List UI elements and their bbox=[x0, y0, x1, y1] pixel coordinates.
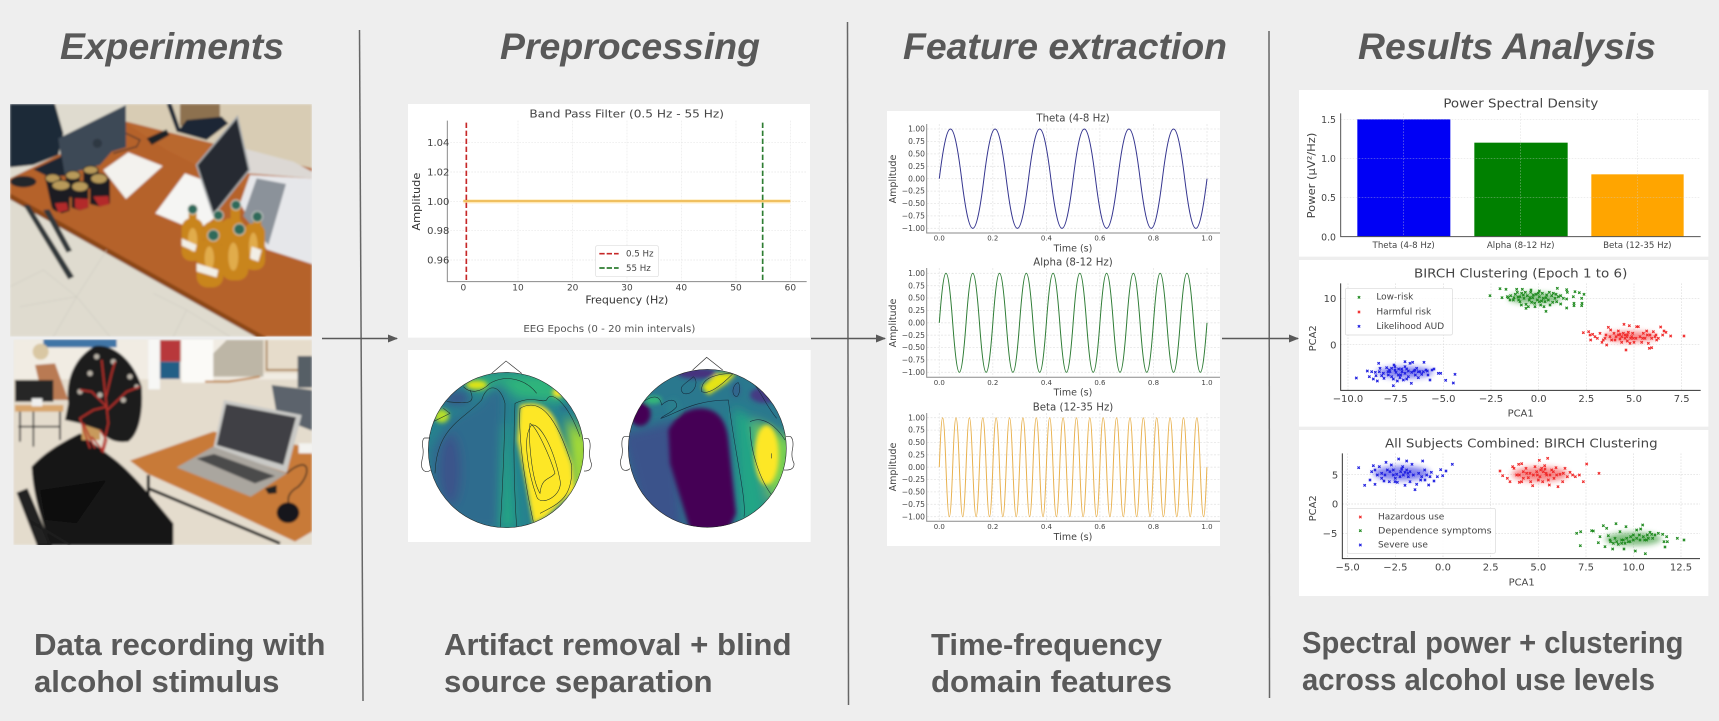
chart: theta wave bbox=[888, 114, 1220, 254]
axis tick labels: −5 bbox=[1323, 529, 1337, 540]
x axis tick labels: 20 bbox=[567, 284, 579, 294]
arrow: preprocessing to feature extraction bbox=[811, 338, 885, 340]
cutoff line 0.5 Hz bbox=[464, 123, 469, 282]
chart: alpha wave: 1.0 bbox=[1201, 379, 1213, 387]
caption: experiments bbox=[34, 627, 326, 699]
y axis tick labels: 1.00 bbox=[427, 197, 449, 208]
caption: feature extraction bbox=[931, 627, 1172, 699]
chart: beta wave: 0.75 bbox=[908, 426, 925, 435]
caption: feature extraction: Time-frequency bbox=[931, 627, 1163, 662]
x axis tick labels: 60 bbox=[785, 284, 796, 294]
legend: Likelihood AUD bbox=[1376, 322, 1444, 332]
chart: beta wave: −0.75 bbox=[902, 500, 925, 509]
axis tick labels: 0 bbox=[1330, 340, 1337, 351]
axis tick labels: 2.5 bbox=[1578, 394, 1594, 405]
axis tick labels: 10.0 bbox=[1623, 562, 1645, 573]
bar: beta bbox=[1591, 174, 1684, 237]
chart: alpha wave: −1.00 bbox=[902, 368, 925, 377]
panel: power spectral density bar chart: Power (μV²/Hz) bbox=[1305, 133, 1318, 218]
y axis ticks and label: 0.5 bbox=[1321, 193, 1336, 204]
caption: preprocessing: source separation bbox=[444, 664, 713, 699]
panel: feature extraction sine charts bbox=[887, 111, 1220, 546]
dense cluster cores bbox=[1377, 293, 1657, 378]
divider line 3 bbox=[1268, 31, 1270, 698]
bar: theta bbox=[1357, 119, 1450, 237]
caption: results analysis: Spectral power + clustering bbox=[1302, 625, 1684, 660]
axis tick labels: 5.0 bbox=[1626, 394, 1642, 405]
y axis tick labels: 0.98 bbox=[427, 226, 449, 237]
chart: beta wave: 0.4 bbox=[1041, 523, 1053, 531]
chart: theta wave: 0.6 bbox=[1094, 234, 1106, 242]
x axis category labels: Theta (4-8 Hz) bbox=[1372, 241, 1435, 251]
axis tick labels: 10 bbox=[1324, 294, 1336, 305]
y axis ticks and label: 1.5 bbox=[1321, 115, 1336, 126]
axis tick labels: 0.0 bbox=[1435, 562, 1451, 573]
chart: beta wave: 0.8 bbox=[1148, 523, 1159, 531]
chart: alpha wave: Amplitude bbox=[888, 299, 899, 347]
chart: beta wave: 0.2 bbox=[987, 523, 998, 531]
legend bbox=[1345, 288, 1452, 335]
photo: table with alcohol stimulus bbox=[10, 104, 312, 337]
legend: Low-risk bbox=[1376, 293, 1414, 303]
legend: Hazardous use bbox=[1378, 513, 1445, 523]
axis labels: PCA2 bbox=[1308, 495, 1319, 521]
chart: theta wave: 0.4 bbox=[1041, 234, 1053, 242]
legend bbox=[1347, 508, 1495, 553]
panel: BIRCH clustering all subjects bbox=[1299, 430, 1708, 596]
chart: beta wave: 0.50 bbox=[908, 438, 925, 447]
y axis tick labels: 1.02 bbox=[427, 168, 449, 179]
chart: beta wave bbox=[888, 402, 1220, 543]
x axis tick labels bbox=[460, 284, 796, 294]
chart: theta wave: 0.00 bbox=[908, 174, 925, 183]
chart: theta wave: Time (s) bbox=[1053, 244, 1092, 254]
panel: BIRCH clustering epoch 1 to 6 bbox=[1299, 260, 1708, 427]
caption: feature extraction: domain features bbox=[931, 664, 1172, 699]
scatter: severe use cluster bbox=[1359, 459, 1452, 490]
chart: theta wave: 0.0 bbox=[934, 234, 945, 242]
chart: theta wave: Theta (4-8 Hz) bbox=[1035, 114, 1110, 124]
legend: 0.5 Hz bbox=[626, 250, 654, 260]
chart title: Band Pass Filter (0.5 Hz - 55 Hz) bbox=[529, 108, 724, 121]
axis tick labels: 2.5 bbox=[1483, 562, 1499, 573]
chart: alpha wave: −0.25 bbox=[902, 331, 925, 340]
axis labels: PCA1 bbox=[1509, 577, 1535, 588]
legend: Harmful risk bbox=[1376, 307, 1432, 317]
chart: beta wave: Beta (12-35 Hz) bbox=[1033, 402, 1113, 414]
chart: alpha wave: Time (s) bbox=[1053, 388, 1092, 398]
chart: beta wave: 0.25 bbox=[908, 450, 925, 459]
arrow: feature extraction to results bbox=[1222, 338, 1298, 340]
chart: alpha wave: −0.75 bbox=[902, 356, 925, 364]
chart: theta wave: 1.00 bbox=[908, 125, 925, 134]
arrow: experiments to preprocessing bbox=[322, 338, 397, 340]
caption: experiments: Data recording with bbox=[34, 627, 326, 662]
chart: theta wave: −0.75 bbox=[902, 212, 925, 220]
axis tick labels: −7.5 bbox=[1384, 394, 1408, 405]
axis labels: PCA1 bbox=[1508, 409, 1534, 420]
x axis tick labels: 30 bbox=[621, 284, 633, 294]
chart: alpha wave: 0.2 bbox=[987, 379, 998, 387]
chart: theta wave: 0.2 bbox=[987, 234, 998, 242]
caption: results analysis bbox=[1302, 625, 1684, 697]
x axis tick labels: 50 bbox=[730, 284, 742, 294]
y axis ticks and label bbox=[1321, 115, 1336, 243]
x axis tick labels: 10 bbox=[512, 284, 524, 294]
heading: Experiments: Experiments bbox=[60, 26, 284, 67]
chart: alpha wave: 1.00 bbox=[908, 269, 925, 278]
panel: band pass filter chart bbox=[408, 104, 810, 338]
legend bbox=[596, 246, 658, 277]
topomap right bbox=[620, 357, 794, 533]
chart title: BIRCH Clustering (Epoch 1 to 6) bbox=[1414, 266, 1627, 280]
divider line 1 bbox=[360, 30, 363, 701]
chart: theta wave: 1.0 bbox=[1201, 234, 1213, 242]
chart title: Power Spectral Density bbox=[1443, 96, 1598, 110]
y axis tick labels bbox=[427, 138, 449, 267]
x axis category labels bbox=[1372, 241, 1672, 251]
heading: Results Analysis: Results Analysis bbox=[1358, 26, 1656, 67]
chart: theta wave: 0.8 bbox=[1148, 234, 1159, 242]
y axis label: Amplitude bbox=[410, 173, 423, 231]
chart: alpha wave: 0.0 bbox=[934, 379, 945, 387]
topomap left bbox=[421, 361, 591, 530]
axis labels: PCA2 bbox=[1308, 325, 1319, 351]
chart: beta wave: 1.00 bbox=[908, 413, 925, 422]
y axis tick labels: 0.96 bbox=[427, 256, 449, 267]
axis tick labels: −10.0 bbox=[1333, 394, 1363, 405]
y axis ticks and label: 1.0 bbox=[1321, 154, 1336, 165]
axis labels bbox=[1308, 495, 1535, 588]
divider line 2 bbox=[848, 22, 849, 705]
heading: Feature extraction: Feature extraction bbox=[903, 26, 1227, 67]
chart: alpha wave: Alpha (8-12 Hz) bbox=[1033, 258, 1113, 268]
scatter: harmful risk cluster bbox=[1583, 324, 1684, 350]
caption: EEG epochs: EEG Epochs (0 - 20 min intervals) bbox=[523, 324, 695, 335]
panel: power spectral density bar chart bbox=[1299, 90, 1708, 257]
x axis tick labels: 40 bbox=[676, 284, 687, 294]
chart: alpha wave: 0.25 bbox=[908, 306, 925, 315]
cutoff line 55 Hz bbox=[760, 123, 765, 282]
scatter: low-risk cluster bbox=[1490, 288, 1584, 311]
axis tick labels: 5 bbox=[1332, 470, 1338, 481]
axis tick labels bbox=[1324, 294, 1690, 405]
scatter: hazardous use cluster bbox=[1500, 458, 1599, 487]
axis tick labels: 12.5 bbox=[1670, 562, 1692, 573]
axis tick labels: −5.0 bbox=[1431, 394, 1455, 405]
x axis category labels: Beta (12-35 Hz) bbox=[1603, 241, 1672, 251]
legend: 55 Hz bbox=[626, 264, 651, 274]
chart: theta wave: −0.25 bbox=[902, 187, 925, 196]
photo: participant wearing EEG cap bbox=[13, 339, 312, 545]
chart: alpha wave: −0.50 bbox=[902, 343, 925, 352]
axis tick labels: 0.0 bbox=[1531, 394, 1547, 405]
heading: Preprocessing: Preprocessing bbox=[500, 26, 760, 67]
y axis ticks and label: 0.0 bbox=[1321, 232, 1336, 243]
chart: theta wave: 0.75 bbox=[908, 137, 925, 146]
chart: beta wave: −0.50 bbox=[902, 488, 925, 496]
chart: alpha wave: 0.75 bbox=[908, 281, 925, 290]
chart: theta wave: Amplitude bbox=[888, 155, 899, 203]
caption: preprocessing: Artifact removal + blind bbox=[444, 627, 792, 662]
chart: beta wave: 0.0 bbox=[934, 523, 945, 531]
chart: beta wave: 1.0 bbox=[1201, 523, 1213, 531]
chart: theta wave: −1.00 bbox=[902, 224, 925, 233]
legend: Severe use bbox=[1378, 540, 1428, 550]
caption: results analysis: across alcohol use levels bbox=[1302, 662, 1655, 697]
chart: beta wave: 0.6 bbox=[1094, 523, 1106, 531]
caption: preprocessing bbox=[444, 627, 792, 699]
panel: EEG topographic maps bbox=[408, 350, 811, 542]
axis tick labels: 5.0 bbox=[1530, 562, 1546, 573]
chart: alpha wave: 0.8 bbox=[1148, 379, 1159, 387]
chart: theta wave: 0.25 bbox=[908, 162, 925, 171]
legend: Dependence symptoms bbox=[1378, 526, 1492, 536]
scatter: likelihood AUD cluster bbox=[1356, 362, 1455, 386]
chart title: All Subjects Combined: BIRCH Clustering bbox=[1385, 436, 1658, 450]
chart: theta wave: −0.50 bbox=[902, 199, 925, 208]
scatter: dependence symptoms cluster bbox=[1577, 524, 1684, 554]
x axis label: Frequency (Hz) bbox=[585, 294, 668, 307]
chart: beta wave: 0.00 bbox=[908, 463, 925, 472]
chart: alpha wave: 0.4 bbox=[1041, 379, 1053, 387]
chart: beta wave: Amplitude bbox=[888, 443, 899, 491]
chart: beta wave: −1.00 bbox=[902, 512, 925, 521]
chart: alpha wave: 0.50 bbox=[908, 294, 925, 303]
chart: beta wave: Time (s) bbox=[1053, 532, 1092, 543]
axis tick labels: 7.5 bbox=[1674, 394, 1690, 405]
chart: alpha wave: 0.6 bbox=[1094, 379, 1106, 387]
axis tick labels: −2.5 bbox=[1479, 394, 1503, 405]
dense cluster cores bbox=[1373, 466, 1662, 546]
axis tick labels: 7.5 bbox=[1578, 562, 1594, 573]
axis tick labels: 0 bbox=[1332, 500, 1338, 511]
caption: experiments: alcohol stimulus bbox=[34, 664, 280, 699]
chart: beta wave: −0.25 bbox=[902, 475, 925, 484]
x axis category labels: Alpha (8-12 Hz) bbox=[1487, 241, 1554, 251]
axis tick labels: −2.5 bbox=[1383, 562, 1407, 573]
axis tick labels bbox=[1323, 470, 1692, 573]
axis labels bbox=[1308, 325, 1534, 420]
x axis tick labels: 0 bbox=[460, 284, 466, 294]
axis tick labels: −5.0 bbox=[1336, 562, 1360, 573]
chart: theta wave: 0.50 bbox=[908, 150, 925, 158]
chart: alpha wave bbox=[888, 258, 1220, 398]
chart: alpha wave: 0.00 bbox=[908, 318, 925, 327]
filter response line bbox=[463, 195, 790, 207]
bar: alpha bbox=[1474, 143, 1568, 237]
y axis tick labels: 1.04 bbox=[427, 138, 449, 149]
